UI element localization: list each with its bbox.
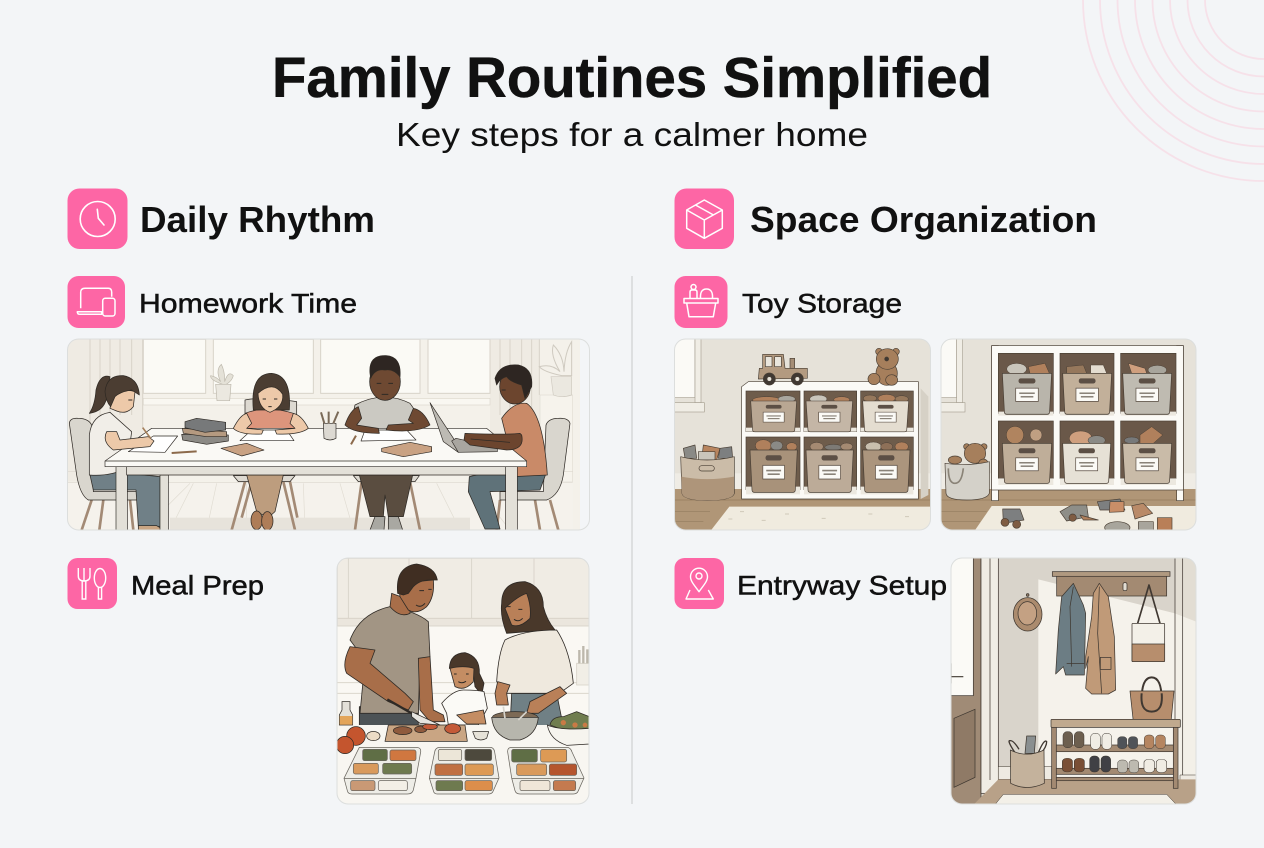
round hat: [1013, 594, 1042, 631]
meal prep container 2: [429, 747, 499, 794]
tan coat: [1086, 583, 1116, 694]
illustration: family preparing meals: [338, 558, 588, 794]
baseboard, floor and rug: [942, 474, 1196, 530]
icon: toy basket: [674, 276, 728, 328]
subsection heading: Meal Prep: [68, 558, 264, 609]
table items: books, notebooks, pencils, laptop: [128, 403, 497, 457]
icon: laptop and phone: [68, 276, 125, 328]
toys in bins: [1006, 363, 1167, 446]
icon: box: [674, 188, 734, 249]
person: boy in orange shirt: [468, 365, 570, 530]
illustration frame: meal prep: [337, 558, 589, 804]
basket of blocks: [681, 445, 734, 501]
subsection heading: Toy Storage: [674, 276, 902, 328]
salad bowl: [547, 712, 589, 745]
canvas tote: [1132, 585, 1165, 662]
umbrella basket: [1009, 736, 1047, 787]
kitchen cabinets: [337, 558, 589, 693]
illustration frame: toy shelf one: [674, 339, 930, 530]
person: mother: [495, 582, 573, 727]
arms on table: [105, 407, 522, 450]
heading text: Space Organization: [750, 199, 1097, 240]
panel: space organization column: [670, 188, 1205, 810]
subsection text: Entryway Setup: [737, 570, 947, 600]
subsection heading: Homework Time: [68, 276, 357, 328]
meal prep container 1: [344, 747, 421, 794]
curtains and windows: [67, 339, 573, 483]
toys in bins: [753, 394, 908, 452]
illustration: toy shelf with bins and truck: [670, 335, 933, 535]
person: boy in grey shirt: [352, 356, 422, 530]
subtitle: Key steps for a calmer home: [396, 116, 868, 153]
illustration frame: homework: [68, 339, 590, 530]
window: [675, 340, 705, 412]
illustration: entryway with coats and shoes: [945, 550, 1205, 810]
mixing bowl: [492, 707, 538, 740]
sunlit wall patch: [1038, 579, 1175, 780]
panel: daily rhythm column: [60, 188, 597, 813]
shelf unit: [992, 346, 1183, 501]
table: [105, 428, 527, 530]
background rings: [1083, 0, 1264, 181]
counter: [358, 725, 554, 728]
person: child: [442, 653, 487, 725]
subsection text: Toy Storage: [742, 288, 902, 318]
illustration: open shelf with toys on floor: [933, 335, 1197, 535]
illustration: family doing homework at table: [60, 335, 580, 535]
person: girl in salmon shirt: [232, 373, 298, 530]
labelled bins: [750, 401, 910, 492]
subsection text: Homework Time: [139, 288, 357, 318]
icon: fork and spoon: [68, 558, 117, 609]
labelled bins: [1002, 373, 1172, 483]
subsection heading: Entryway Setup: [674, 558, 947, 609]
divider: [631, 276, 633, 804]
icon: map pin: [674, 558, 724, 609]
door and frame: [945, 550, 1183, 810]
baseboard and floor: [675, 474, 930, 530]
coat rack: [1052, 572, 1170, 596]
shoes: [1062, 732, 1167, 773]
chopping board with knife: [385, 699, 489, 741]
plants: [211, 342, 572, 401]
blue jacket: [1056, 583, 1086, 675]
person: girl with ponytail: [69, 376, 164, 530]
icon: clock: [68, 188, 128, 249]
window: [942, 340, 966, 412]
toys on floor: [1001, 499, 1172, 534]
shoe bench: [1051, 719, 1180, 788]
title: Family Routines Simplified: [272, 46, 992, 110]
leather bag: [1130, 677, 1174, 722]
teddy in basket: [945, 443, 989, 500]
subsection text: Meal Prep: [131, 570, 264, 600]
section heading: Daily Rhythm: [68, 188, 375, 249]
toy truck: [758, 354, 807, 385]
floor: [67, 472, 573, 530]
bottle, tomatoes and egg: [336, 702, 380, 754]
baseboard and floor: [968, 767, 1205, 810]
person: father: [345, 564, 445, 727]
meal prep container 3: [508, 747, 584, 794]
teddy bear: [868, 348, 899, 385]
heading text: Daily Rhythm: [140, 199, 375, 240]
illustration frame: entryway: [951, 558, 1196, 804]
section heading: Space Organization: [674, 188, 1097, 249]
shelf unit: [742, 382, 928, 499]
illustration frame: toy shelf two: [941, 339, 1196, 530]
